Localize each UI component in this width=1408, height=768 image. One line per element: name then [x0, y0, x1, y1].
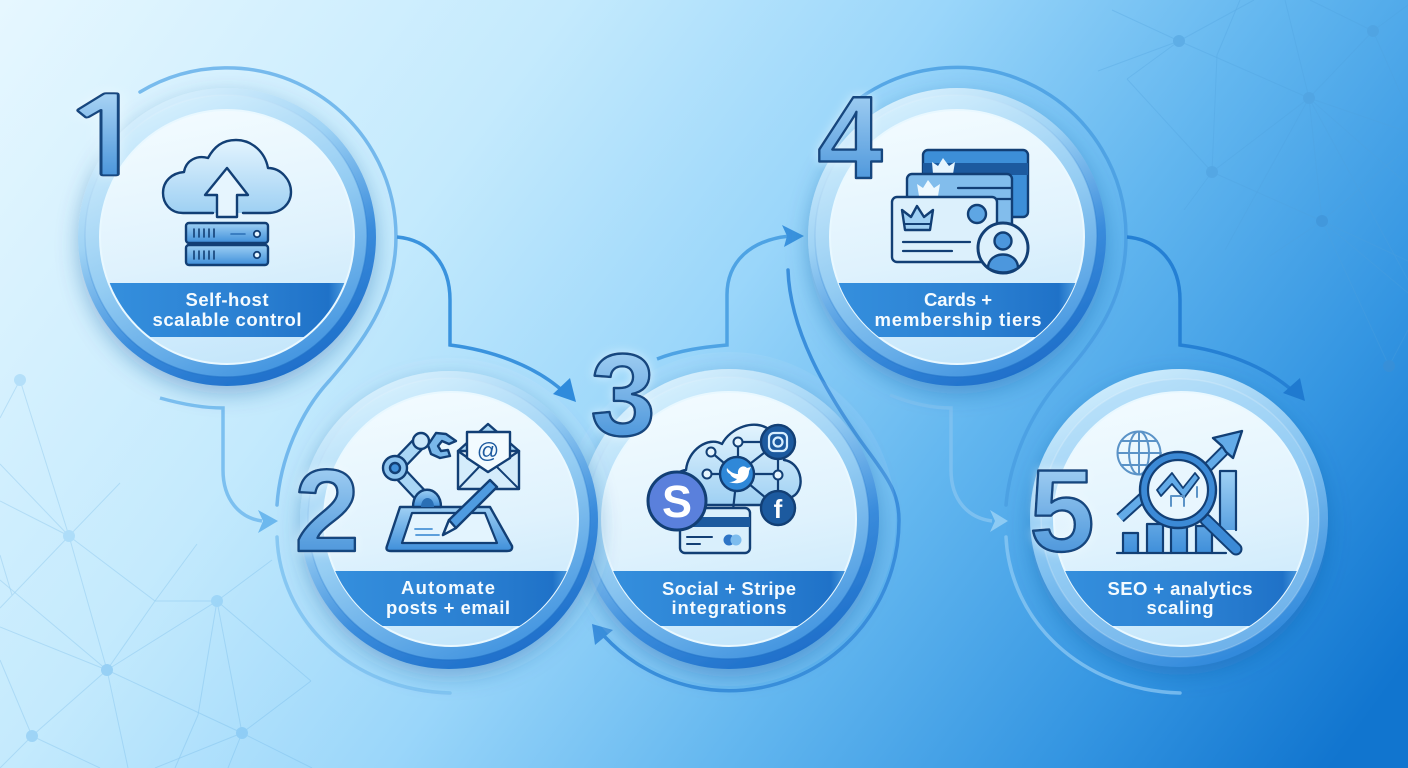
panel: step 5 SEO: [1029, 369, 1328, 667]
network pattern: bottom left: [0, 374, 312, 768]
icon glyph: at sign: @: [477, 438, 499, 463]
arrow: step 4 around step 3: [592, 270, 899, 691]
banner: step 5: [1054, 571, 1308, 626]
icon: membership cards and user: [892, 150, 1028, 273]
panel: step 2 automate: [288, 358, 612, 682]
arrow: step 4 to step 5: [890, 395, 1008, 532]
banner: step 2: [324, 571, 578, 626]
orbit arc: around step 1 into step 2: [140, 68, 396, 505]
icon glyph: facebook f: f: [774, 494, 783, 524]
number 1: 1: [57, 84, 155, 191]
label: step 4: membership tiers: [874, 309, 1042, 330]
arrow: step 1 to step 2: [160, 398, 278, 533]
icon glyph: stripe S: S: [662, 476, 692, 527]
label: step 1: Self-host: [186, 289, 268, 310]
number 4: 4: [817, 72, 883, 203]
banner: step 4: [830, 283, 1084, 337]
label: step 2: Automate: [401, 577, 495, 598]
number 3: 3: [590, 329, 656, 460]
icon: globe, growth chart and magnifier: [1117, 431, 1242, 553]
panel: step 1 self-host: [57, 84, 376, 386]
label: step 3: integrations: [672, 597, 786, 618]
number 5: 5: [1029, 445, 1095, 576]
icon: robot arm, envelope, tablet and pen: [383, 424, 519, 551]
banner: step 1: [100, 283, 354, 337]
number 2: 2: [294, 445, 360, 576]
icon: cloud upload and server: [163, 140, 291, 265]
label: step 3: Social + Stripe: [662, 578, 796, 599]
panel: step 4 cards: [808, 72, 1106, 386]
orbit arc: below step 2: [277, 537, 450, 693]
label: step 5: SEO + analytics: [1108, 578, 1252, 599]
label: step 1: scalable control: [152, 309, 302, 330]
orbit arc: below step 5: [1006, 537, 1180, 693]
banner: step 3: [602, 571, 856, 626]
panel: step 3 integrations: [585, 348, 896, 682]
arrow: step 4 to step 5 upper: [1127, 237, 1305, 401]
label: step 4: Cards +: [924, 289, 992, 310]
icon: social network and stripe card: [648, 425, 801, 553]
orbit arc: around step 4 into step 5: [860, 67, 1126, 505]
arrow: step 3 to step 4: [657, 225, 804, 359]
label: step 5: scaling: [1146, 597, 1214, 618]
network pattern: top right: [1098, 0, 1408, 372]
arrow: step 1 to step 3: [397, 237, 576, 402]
label: step 2: posts + email: [386, 597, 510, 618]
